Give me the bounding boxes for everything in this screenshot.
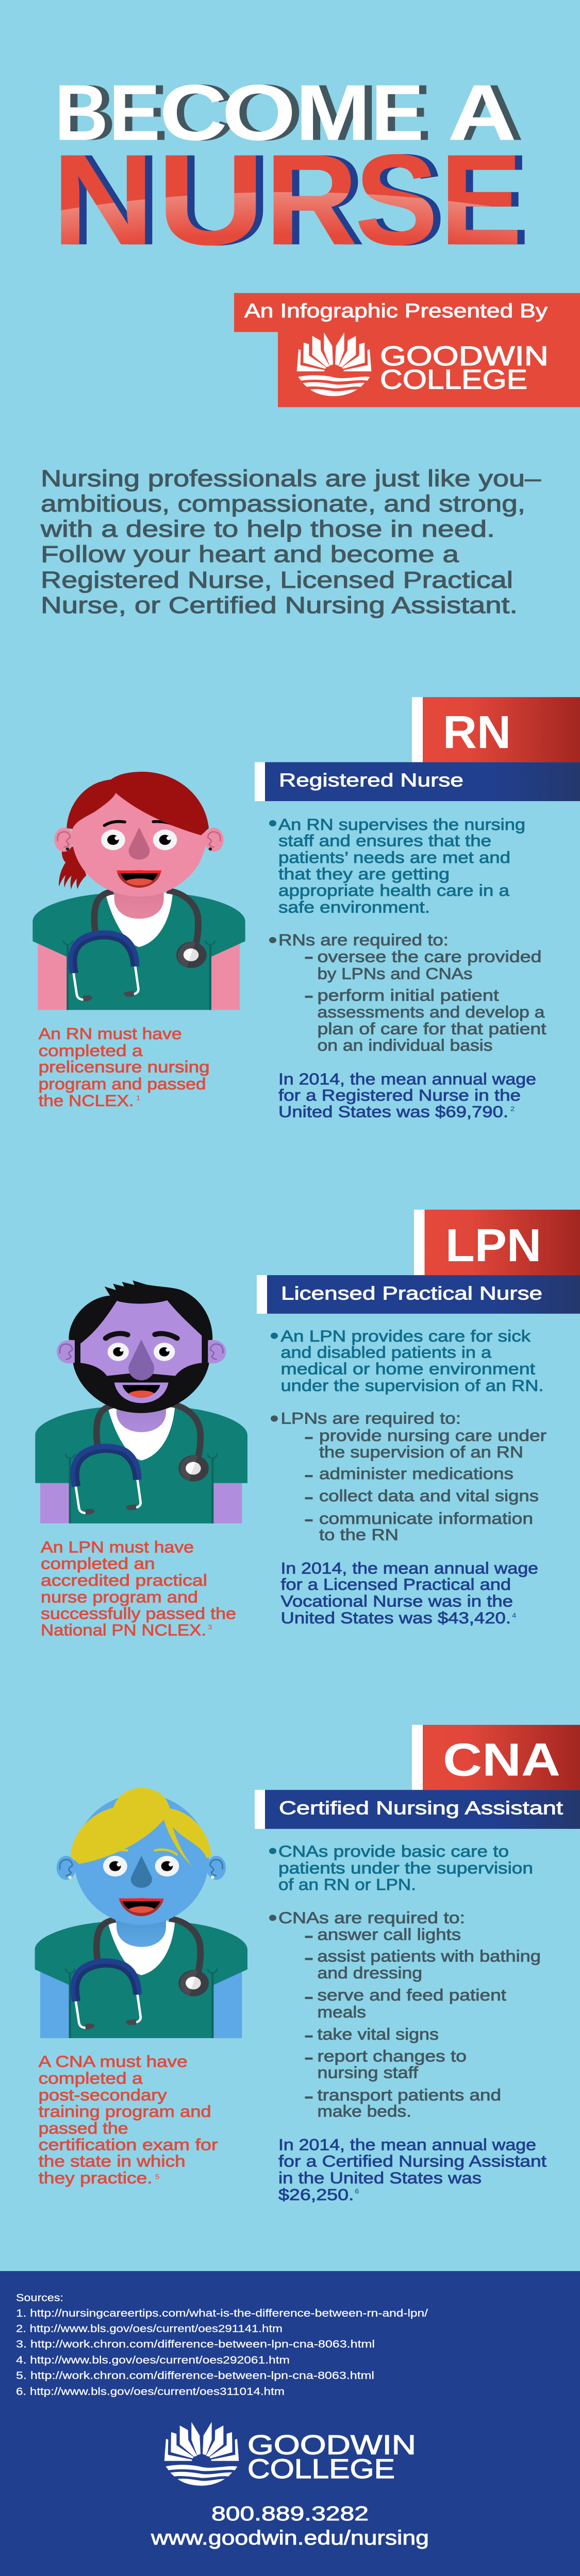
sources list: Sources:	[16, 2292, 63, 2303]
RN duties list: oversee the care provided	[318, 948, 541, 966]
RN duties list: RNs are required to:	[278, 931, 449, 949]
RN duties list: plan of care for that patient	[318, 1020, 546, 1038]
CNA requirements caption: certification exam for	[39, 2136, 218, 2154]
LPN duties list: provide nursing care under	[319, 1427, 546, 1445]
LPN requirements caption: successfully passed the	[41, 1605, 236, 1623]
RN requirements caption: completed a	[39, 1042, 143, 1060]
RN wage: In 2014, the mean annual wage	[278, 1070, 536, 1088]
CNA requirements caption: passed the	[39, 2120, 128, 2138]
intro text block: ambitious, compassionate, and strong,	[41, 491, 525, 517]
title: Become a: B	[55, 69, 108, 157]
intro text block: with a desire to help those in need.	[40, 516, 495, 542]
LPN duties list	[271, 1410, 546, 1544]
character: RN nurse	[32, 772, 245, 1010]
CNA duties list: report changes to	[318, 2047, 467, 2065]
CNA duties list: assist patients with bathing	[318, 1947, 541, 1965]
website: www.goodwin.edu/nursing	[151, 2527, 429, 2549]
sources list: 5. http://work.chron.com/difference-between-lpn-cna-8063.html	[16, 2369, 374, 2381]
LPN duties list: administer medications	[319, 1465, 513, 1483]
LPN duties list: the supervision of an RN	[319, 1443, 523, 1461]
RN description: An RN supervises the nursing	[278, 816, 525, 834]
CNA wage	[278, 2136, 546, 2204]
RN requirements caption: the NCLEX.	[39, 1092, 134, 1110]
title: Nurse	[52, 128, 522, 272]
intro text block: Nurse, or Certified Nursing Assistant.	[41, 592, 518, 618]
intro text block	[40, 466, 541, 618]
LPN description	[271, 1327, 543, 1395]
CNA duties list: take vital signs	[318, 2025, 439, 2043]
RN requirements caption	[39, 1025, 210, 1110]
CNA duties list: nursing staff	[318, 2064, 418, 2082]
title: Become a: O	[222, 69, 296, 157]
footer wordmark: College: COLLEGE	[247, 2454, 395, 2484]
RN wage: for a Registered Nurse in the	[278, 1087, 521, 1105]
CNA requirements caption: completed a	[39, 2070, 143, 2088]
RN requirements caption: An RN must have	[39, 1025, 182, 1043]
LPN description: medical or home environment	[280, 1360, 535, 1378]
CNA title: Certified Nursing Assistant	[279, 1798, 563, 1819]
LPN description: An LPN provides care for sick	[280, 1327, 531, 1345]
LPN duties list: LPNs are required to:	[280, 1410, 461, 1428]
LPN description: under the supervision of an RN.	[280, 1377, 543, 1395]
phone number: 800.889.3282	[211, 2502, 369, 2524]
CNA wage: 6	[355, 2188, 359, 2195]
RN duties list: by LPNs and CNAs	[318, 965, 472, 983]
CNA duties list: serve and feed patient	[318, 1987, 506, 2005]
character: CNA nurse	[35, 1788, 247, 2038]
intro text block: Registered Nurse, Licensed Practical	[41, 567, 513, 593]
sources list: 6. http://www.bls.gov/oes/current/oes311014.htm	[16, 2385, 285, 2397]
sources list: 2. http://www.bls.gov/oes/current/oes291141.htm	[16, 2323, 283, 2334]
RN duties list	[269, 931, 546, 1055]
CNA requirements caption: post-secondary	[39, 2086, 167, 2104]
CNA duties list: answer call lights	[318, 1926, 461, 1944]
RN wage	[278, 1070, 536, 1121]
CNA description: of an RN or LPN.	[278, 1876, 416, 1894]
RN requirements caption: program and passed	[39, 1075, 206, 1093]
title: Nurse: N	[52, 128, 155, 272]
RN title: Registered Nurse	[279, 770, 463, 791]
panel: CNA header	[255, 1725, 580, 1829]
CNA requirements caption: A CNA must have	[39, 2053, 188, 2071]
LPN requirements caption: An LPN must have	[41, 1538, 194, 1556]
title: Nurse: U	[157, 128, 265, 272]
title: Become a: A	[448, 69, 517, 157]
CNA duties list: and dressing	[318, 1964, 422, 1982]
CNA wage: in the United States was	[278, 2169, 482, 2187]
LPN requirements caption: accredited practical	[41, 1572, 207, 1590]
LPN duties list: to the RN	[319, 1526, 399, 1544]
sources list: 3. http://work.chron.com/difference-between-lpn-cna-8063.html	[16, 2338, 375, 2350]
RN duties list: assessments and develop a	[318, 1003, 545, 1021]
title: Become a: M	[295, 69, 371, 157]
character: LPN nurse	[35, 1280, 247, 1523]
CNA duties list: meals	[318, 2003, 366, 2021]
RN description: staff and ensures that the	[278, 832, 491, 850]
LPN duties list: communicate information	[319, 1510, 533, 1528]
CNA wage: for a Certified Nursing Assistant	[278, 2153, 546, 2171]
presented by text: An Infographic Presented By	[244, 300, 548, 321]
CNA description: patients under the supervision	[278, 1859, 533, 1877]
CNA requirements caption: 5	[155, 2173, 160, 2180]
LPN duties list: collect data and vital signs	[319, 1487, 539, 1505]
CNA requirements caption: training program and	[39, 2103, 211, 2121]
sources list: 4. http://www.bls.gov/oes/current/oes292061.htm	[16, 2354, 290, 2366]
title: Become a: E	[109, 69, 160, 157]
CNA requirements caption	[39, 2053, 218, 2187]
RN description: that they are getting	[278, 865, 450, 883]
RN abbreviation: RN	[443, 706, 511, 758]
CNA abbreviation: CNA	[443, 1734, 560, 1786]
CNA wage: In 2014, the mean annual wage	[278, 2136, 536, 2154]
CNA requirements caption: the state in which	[39, 2153, 186, 2171]
RN description: patients’ needs are met and	[278, 849, 510, 867]
footer wordmark: Goodwin: GOODWIN	[247, 2430, 416, 2461]
title: Nurse: E	[440, 128, 522, 272]
title: Become a: C	[159, 69, 227, 157]
CNA duties list: transport patients and	[318, 2086, 501, 2104]
logo wordmark: College: COLLEGE	[380, 364, 527, 395]
LPN description: and disabled patients in a	[280, 1344, 492, 1362]
RN description: safe environment.	[278, 899, 430, 917]
LPN abbreviation: LPN	[445, 1219, 541, 1271]
panel: presented by	[234, 293, 580, 407]
icon: Goodwin College footer logo	[164, 2422, 239, 2486]
sources list: 1. http://nursingcareertips.com/what-is-the-difference-between-rn-and-lpn/	[16, 2307, 428, 2319]
CNA duties list: CNAs are required to:	[278, 1909, 465, 1927]
intro text block: Nursing professionals are just like you–	[41, 466, 541, 492]
CNA description: CNAs provide basic care to	[278, 1842, 509, 1860]
RN requirements caption: prelicensure nursing	[39, 1058, 210, 1076]
LPN wage: 4	[512, 1612, 517, 1619]
intro text block: Follow your heart and become a	[41, 541, 459, 567]
LPN wage: United States was $43,420.	[280, 1609, 511, 1628]
RN wage: United States was $69,790.	[278, 1103, 508, 1121]
LPN requirements caption: nurse program and	[41, 1588, 198, 1606]
CNA duties list: make beds.	[318, 2103, 411, 2121]
logo wordmark: Goodwin: GOODWIN	[380, 341, 549, 371]
RN requirements caption: 1	[136, 1094, 141, 1102]
LPN wage: for a Licensed Practical and	[280, 1575, 511, 1594]
LPN requirements caption: National PN NCLEX.	[41, 1621, 206, 1639]
LPN requirements caption: completed an	[41, 1555, 155, 1573]
LPN requirements caption: 3	[208, 1623, 212, 1631]
RN duties list: on an individual basis	[318, 1037, 492, 1055]
RN description	[269, 816, 525, 917]
panel: footer	[0, 2271, 580, 2576]
title: Become a	[55, 69, 517, 157]
RN description: appropriate health care in a	[278, 882, 510, 900]
CNA requirements caption: they practice.	[39, 2169, 153, 2187]
title: Nurse: S	[355, 128, 438, 272]
title: Nurse: R	[265, 128, 358, 272]
LPN title: Licensed Practical Nurse	[281, 1283, 542, 1304]
LPN wage: Vocational Nurse was in the	[280, 1592, 513, 1611]
CNA description	[269, 1842, 533, 1894]
LPN wage: In 2014, the mean annual wage	[280, 1560, 538, 1578]
LPN requirements caption	[41, 1538, 236, 1639]
panel: RN header	[255, 697, 580, 801]
panel: LPN header	[257, 1210, 580, 1314]
LPN wage	[280, 1560, 538, 1628]
icon: Goodwin College logo	[297, 332, 371, 396]
RN duties list: perform initial patient	[318, 987, 499, 1005]
sources list	[16, 2292, 428, 2397]
RN wage: 2	[510, 1105, 515, 1112]
CNA wage: $26,250.	[278, 2186, 354, 2204]
title: Become a: E	[371, 69, 424, 157]
CNA duties list	[269, 1909, 541, 2121]
